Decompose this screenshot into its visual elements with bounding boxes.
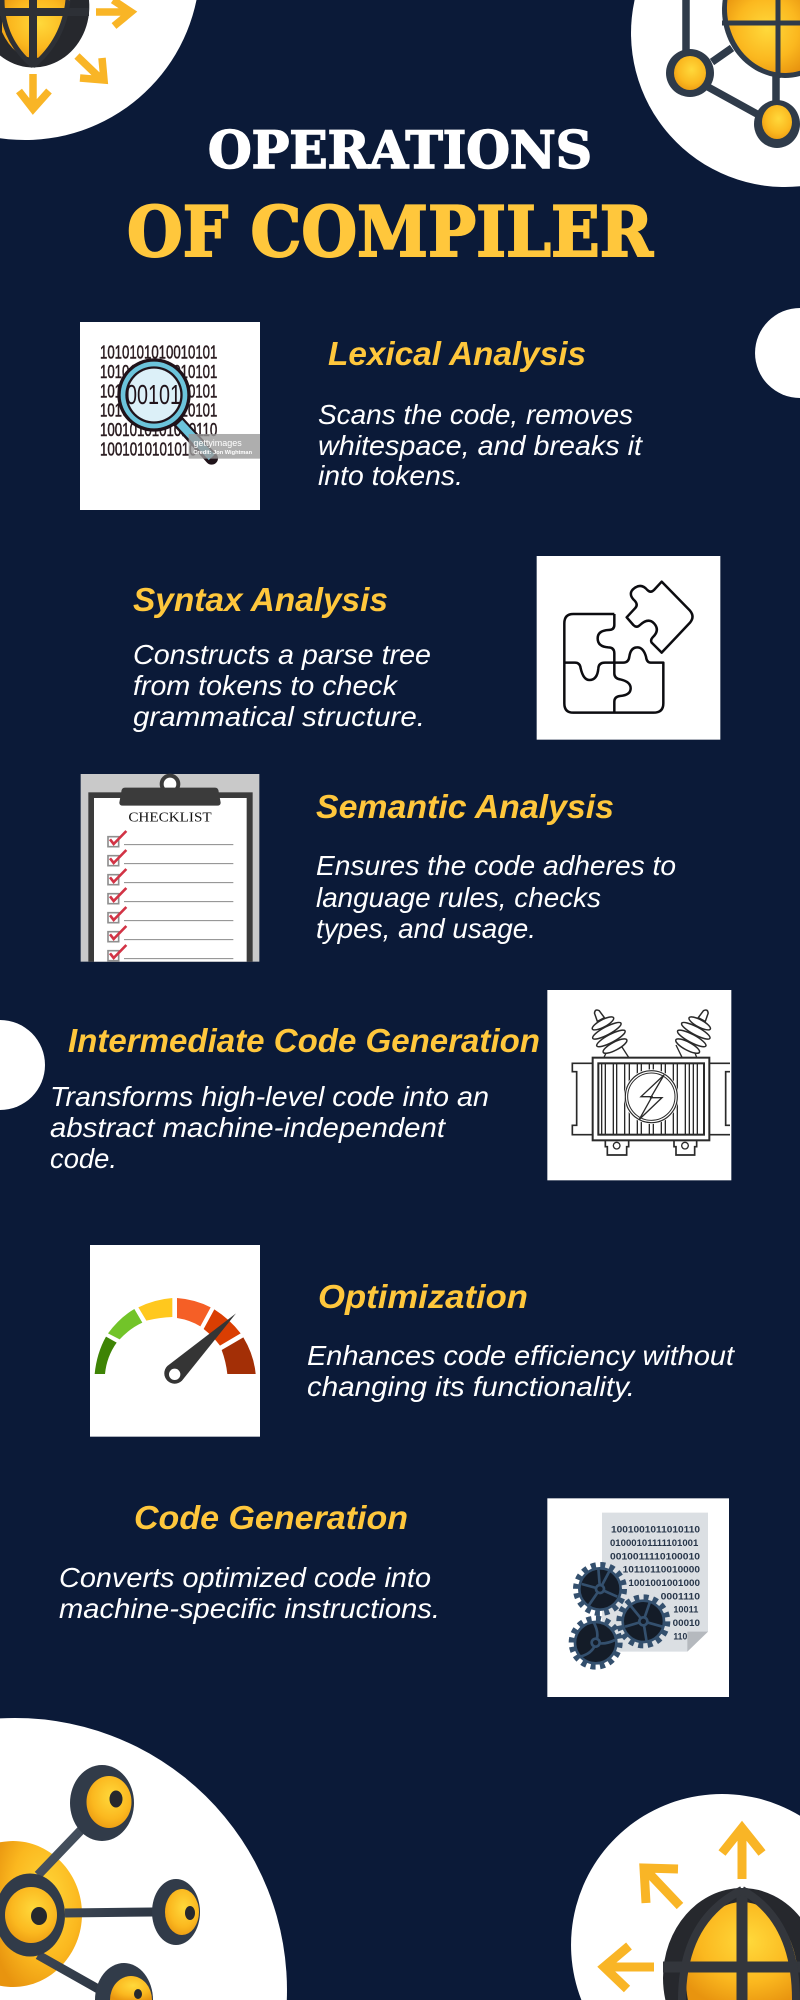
text block: Ensures the code adheres to — [316, 850, 676, 881]
panel: code generation — [59, 1498, 729, 1697]
icon: checklist clipboard — [81, 774, 259, 962]
heading: Optimization — [318, 1278, 528, 1315]
text block: from tokens to check — [133, 670, 398, 701]
panel: syntax analysis — [133, 556, 720, 740]
title: OF COMPILER — [127, 192, 654, 273]
icon: magnifier over binary: 1010101010010101 — [100, 361, 217, 382]
right edge circle — [755, 308, 800, 398]
icon: checklist clipboard: CHECKLIST — [128, 811, 212, 826]
heading: Code Generation — [134, 1499, 408, 1536]
panel: optimization — [90, 1245, 735, 1437]
icon: speedometer gauge — [90, 1245, 260, 1437]
top left corner: globe with arrows — [0, 0, 196, 140]
text block — [307, 1340, 735, 1402]
text block: Constructs a parse tree — [133, 639, 431, 670]
icon: puzzle — [537, 556, 720, 740]
icon: gears and binary document: 0001110 — [661, 1591, 700, 1601]
title — [127, 121, 654, 273]
text block: Enhances code efficiency without — [307, 1340, 735, 1371]
bottom right corner: globe with arrows — [571, 1794, 800, 2000]
heading: Lexical Analysis — [328, 335, 586, 372]
top right corner: network globe — [631, 0, 800, 187]
icon: gears and binary document: 10011 — [673, 1605, 698, 1615]
text block: into tokens. — [318, 460, 463, 491]
icon: magnifier over binary: 1010101010010101 — [100, 341, 217, 362]
icon: magnifier over binary: 1010101010010101 — [100, 400, 217, 421]
title: OPERATIONS — [208, 121, 592, 181]
text block — [318, 399, 643, 491]
text block — [133, 639, 431, 732]
text block — [50, 1081, 489, 1174]
text block: code. — [50, 1143, 117, 1174]
icon: magnifier over binary: 00101 — [126, 379, 181, 410]
text block: language rules, checks — [316, 882, 601, 913]
icon: gears and binary document: 110 — [673, 1631, 687, 1641]
bottom left corner: network nodes — [0, 1718, 287, 2000]
text block: whitespace, and breaks it — [318, 430, 643, 461]
heading: Syntax Analysis — [133, 581, 388, 618]
icon: gears and binary document: 1001001001000 — [628, 1578, 700, 1588]
icon: gears and binary document: 0010011110100010 — [610, 1551, 700, 1561]
text block: Converts optimized code into — [59, 1562, 431, 1593]
icon: magnifier over binary: Credit: Jon Wightman — [193, 450, 253, 456]
icon: magnifier over binary: 1001010101010110 — [100, 419, 217, 440]
text block: machine-specific instructions. — [59, 1593, 440, 1624]
panel: semantic analysis — [81, 774, 676, 962]
icon: gears and binary document: 01000101111101001 — [610, 1538, 698, 1548]
icon: gears and binary document: 00010 — [673, 1618, 700, 1628]
icon: gears and binary document: 1001001011010110 — [611, 1525, 700, 1535]
icon: magnifier over binary — [80, 322, 260, 510]
icon: gears and binary document: 10110110010000 — [623, 1565, 700, 1575]
text block: Transforms high-level code into an — [50, 1081, 489, 1112]
text block: grammatical structure. — [133, 701, 425, 732]
text block: abstract machine-independent — [50, 1112, 446, 1143]
text block — [316, 850, 676, 944]
text block: types, and usage. — [316, 913, 536, 944]
heading: Intermediate Code Generation — [68, 1022, 540, 1059]
text block — [59, 1562, 440, 1624]
icon: magnifier over binary: gettyimages — [193, 438, 242, 448]
icon: magnifier over binary: 1010010101010101 — [100, 380, 217, 401]
panel: intermediate code generation — [50, 990, 731, 1180]
text block: Scans the code, removes — [318, 399, 633, 430]
left edge circle — [0, 1020, 45, 1110]
panel: lexical analysis — [80, 322, 643, 510]
text block: changing its functionality. — [307, 1371, 635, 1402]
heading: Semantic Analysis — [316, 788, 614, 825]
icon: transformer — [547, 990, 731, 1180]
icon: gears and binary document — [547, 1498, 729, 1697]
icon: magnifier over binary: 1001010101010 — [100, 438, 197, 459]
